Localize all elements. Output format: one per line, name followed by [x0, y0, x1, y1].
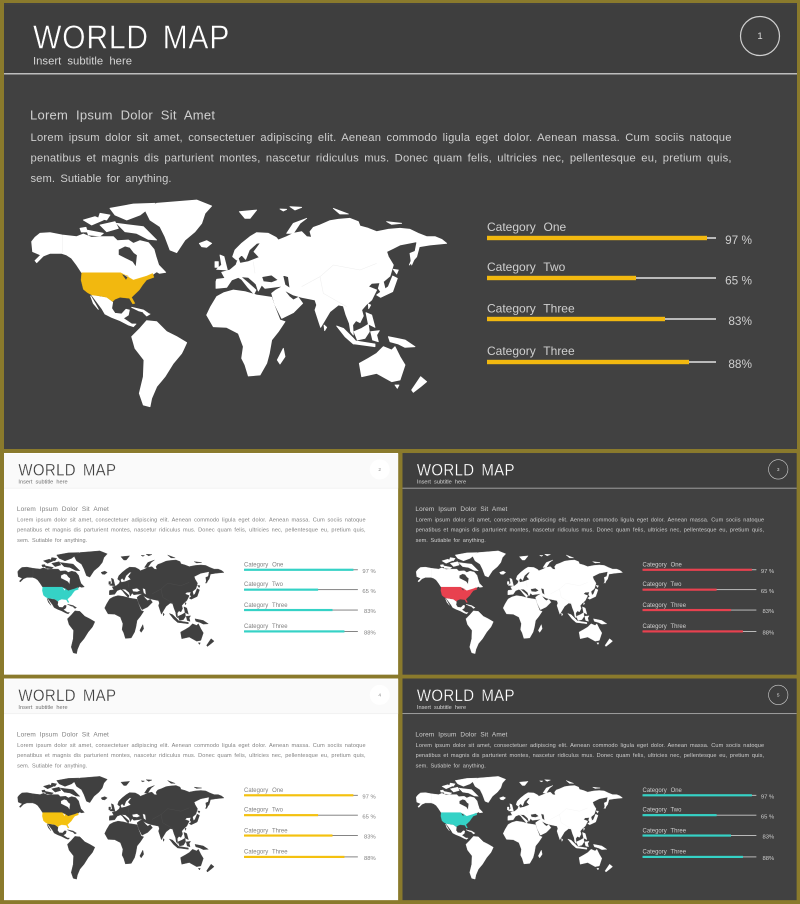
category two: Category Two [244, 808, 284, 814]
body text: sem. Sutiable for anything. [17, 763, 88, 769]
category one: Category One [244, 788, 284, 794]
category one: 97 % [761, 794, 774, 800]
page number badge [370, 460, 389, 479]
header band [4, 454, 398, 489]
title: WORLD [18, 462, 76, 480]
header band [4, 5, 797, 74]
category three second: Category Three [643, 624, 687, 630]
page number badge: 5 [777, 692, 780, 698]
category three: 83% [364, 835, 376, 841]
category three: 83% [763, 835, 774, 841]
category three second [244, 849, 376, 862]
body text: penatibus et magnis dis parturient montes, nascetur ridiculus mus. Donec quam felis, ultricies nec, pellentesque eu, pretium quis, [30, 152, 732, 164]
subtitle: Insert subtitle here [18, 705, 68, 711]
body text: Lorem ipsum dolor sit amet, consectetuer adipiscing elit. Aenean commodo ligula eget dolor. Aenean massa. Cum sociis natoque [416, 743, 764, 749]
category three: Category Three [487, 302, 575, 316]
body text [416, 518, 765, 544]
panel: slide 3 [402, 453, 797, 675]
category three [487, 302, 752, 328]
text heading: Lorem Ipsum Dolor Sit Amet [30, 108, 215, 122]
world map [32, 200, 447, 407]
bar chart [487, 220, 753, 371]
body text [416, 743, 765, 769]
category two: 65 % [761, 814, 774, 820]
world map [18, 776, 224, 879]
world map [416, 551, 623, 654]
category two [244, 808, 376, 820]
category three: Category Three [643, 828, 687, 834]
category one: Category One [643, 788, 683, 794]
title: MAP [83, 687, 116, 705]
category one [487, 220, 753, 247]
text heading: Lorem Ipsum Dolor Sit Amet [415, 506, 508, 513]
category two [487, 260, 753, 288]
category one [244, 562, 376, 575]
category three second [487, 344, 752, 371]
category one: 97 % [362, 569, 376, 575]
category three second: 88% [364, 630, 376, 636]
title: MAP [481, 687, 515, 705]
body text: Lorem ipsum dolor sit amet, consectetuer adipiscing elit. Aenean commodo ligula eget dolor. Aenean massa. Cum sociis natoque [416, 518, 764, 524]
category three: Category Three [643, 603, 687, 609]
subtitle: Insert subtitle here [18, 480, 68, 486]
category three second: Category Three [244, 624, 288, 630]
category two: Category Two [643, 808, 682, 814]
world map [18, 551, 224, 654]
category three second: 88% [364, 856, 376, 862]
bar chart [643, 562, 774, 636]
body text: Lorem ipsum dolor sit amet, consectetuer adipiscing elit. Aenean commodo ligula eget dolor. Aenean massa. Cum sociis natoque [30, 132, 732, 144]
page number badge: 4 [378, 692, 381, 698]
body text: penatibus et magnis dis parturient montes, nascetur ridiculus mus. Donec quam felis, ultricies nec, pellentesque eu, pretium quis, [416, 753, 765, 759]
category three [244, 828, 376, 841]
category two: 65 % [362, 589, 376, 595]
category three [643, 603, 774, 615]
category two: 65 % [761, 589, 774, 595]
page number badge: 2 [378, 467, 381, 473]
category one [643, 788, 774, 800]
title: WORLD [417, 687, 474, 705]
title: WORLD [417, 462, 474, 480]
category three: 83% [728, 314, 752, 328]
bar chart [244, 562, 376, 636]
page number badge: 3 [777, 467, 780, 473]
title: MAP [481, 462, 515, 480]
text heading: Lorem Ipsum Dolor Sit Amet [415, 731, 508, 738]
subtitle: Insert subtitle here [417, 705, 466, 711]
body text [30, 132, 732, 185]
body text: penatibus et magnis dis parturient montes, nascetur ridiculus mus. Donec quam felis, ultricies nec, pellentesque eu, pretium quis, [416, 528, 765, 534]
category two [643, 582, 774, 595]
category three: Category Three [244, 603, 288, 609]
body text: sem. Sutiable for anything. [416, 538, 486, 544]
header band [4, 679, 398, 714]
text heading: Lorem Ipsum Dolor Sit Amet [17, 731, 109, 738]
body text: sem. Sutiable for anything. [416, 763, 486, 769]
category one [244, 788, 376, 800]
category three second: 88% [763, 856, 774, 862]
category three: 83% [364, 609, 376, 615]
page number badge [370, 685, 389, 705]
category three [643, 828, 774, 841]
page number badge [740, 16, 780, 56]
title: WORLD [18, 687, 76, 705]
body text: Lorem ipsum dolor sit amet, consectetuer adipiscing elit. Aenean commodo ligula eget dolor. Aenean massa. Cum sociis natoque [17, 518, 366, 524]
category three second: Category Three [244, 849, 288, 855]
category two [244, 582, 376, 595]
category two: Category Two [244, 582, 284, 588]
category two: Category Two [643, 582, 682, 588]
category one [643, 562, 774, 575]
subtitle: Insert subtitle here [33, 56, 132, 68]
panel: slide 2 [4, 453, 398, 675]
category one: 97 % [725, 233, 753, 247]
body text [17, 743, 366, 769]
category three second [643, 849, 774, 862]
body text: penatibus et magnis dis parturient montes, nascetur ridiculus mus. Donec quam felis, ultricies nec, pellentesque eu, pretium quis, [17, 528, 366, 534]
header band [402, 679, 797, 714]
category three: Category Three [244, 828, 288, 834]
title: MAP [83, 462, 116, 480]
text heading: Lorem Ipsum Dolor Sit Amet [17, 506, 109, 513]
header band [402, 454, 797, 489]
category three second: 88% [728, 357, 752, 371]
category three: 83% [763, 609, 774, 615]
body text: sem. Sutiable for anything. [17, 538, 88, 544]
body text: sem. Sutiable for anything. [30, 173, 172, 185]
body text: penatibus et magnis dis parturient montes, nascetur ridiculus mus. Donec quam felis, ultricies nec, pellentesque eu, pretium quis, [17, 753, 366, 759]
page number badge [769, 460, 788, 479]
category two: 65 % [362, 814, 376, 820]
category three second [643, 624, 774, 636]
title: WORLD [33, 18, 149, 56]
world map [416, 776, 623, 879]
subtitle: Insert subtitle here [417, 480, 466, 486]
category two: 65 % [725, 274, 753, 288]
category two [643, 808, 774, 820]
bar chart [244, 788, 376, 862]
category three second: Category Three [487, 344, 575, 358]
title: MAP [163, 18, 230, 56]
category three second [244, 624, 376, 636]
panel: slide 1 [4, 3, 797, 449]
category three [244, 603, 376, 615]
category three second: 88% [763, 630, 774, 636]
page number badge: 1 [757, 31, 763, 42]
category three second: Category Three [643, 849, 687, 855]
bar chart [643, 788, 774, 862]
category one: Category One [643, 562, 683, 568]
category one: Category One [244, 562, 284, 568]
panel: slide 5 [402, 678, 797, 900]
category one: 97 % [761, 569, 774, 575]
body text: Lorem ipsum dolor sit amet, consectetuer adipiscing elit. Aenean commodo ligula eget dolor. Aenean massa. Cum sociis natoque [17, 743, 366, 749]
category one: 97 % [362, 794, 376, 800]
category two: Category Two [487, 260, 566, 274]
page number badge [769, 685, 788, 705]
body text [17, 518, 366, 544]
panel: slide 4 [4, 678, 398, 900]
category one: Category One [487, 220, 567, 234]
